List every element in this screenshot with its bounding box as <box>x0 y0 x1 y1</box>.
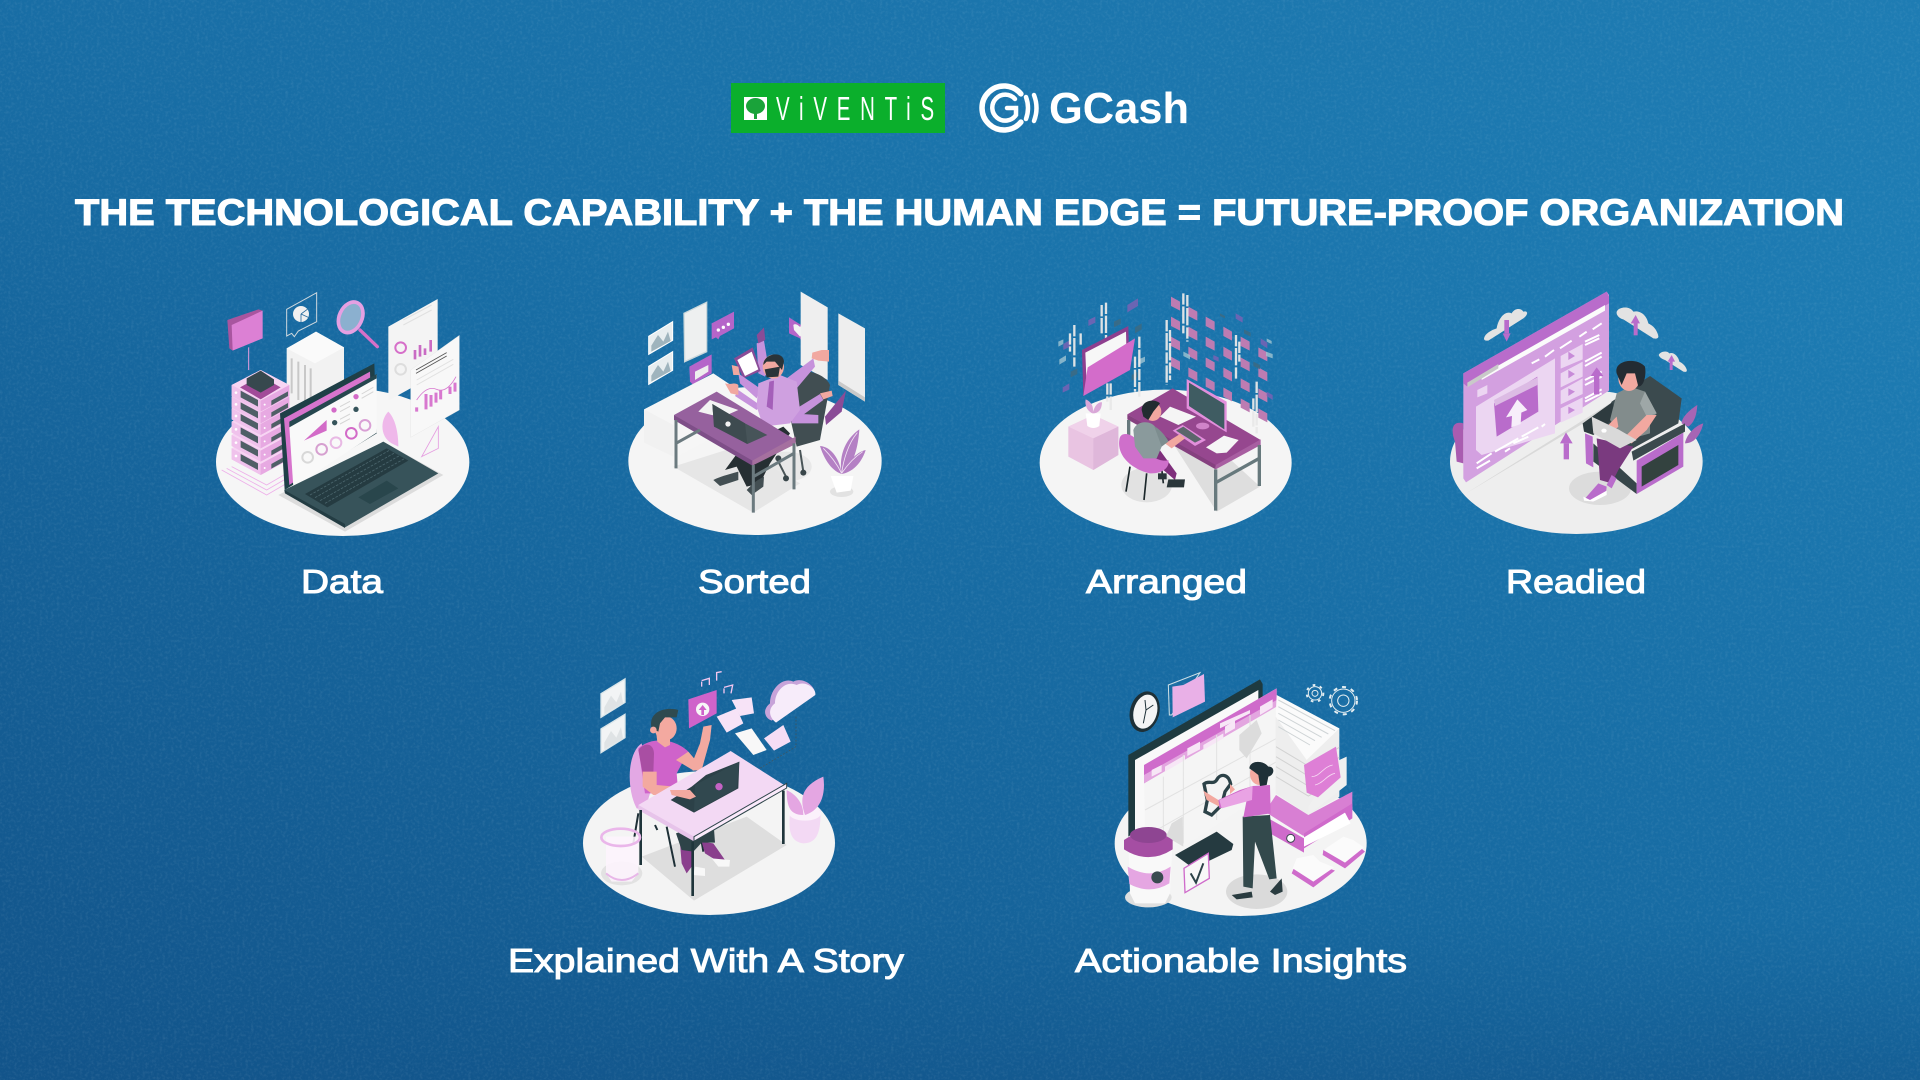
title: THE TECHNOLOGICAL CAPABILITY + THE HUMAN EDGE = FUTURE-PROOF ORGANIZATION <box>75 191 1844 233</box>
label: Readied: Readied <box>1506 563 1646 600</box>
logo: GCash: GCash <box>1049 84 1189 133</box>
label: Explained With A Story: Explained With A Story <box>508 942 905 979</box>
illustration: puzzle and calendar <box>1115 673 1367 916</box>
illustration: data dashboard <box>216 293 469 536</box>
logo: Viventis <box>731 83 945 133</box>
label: Actionable Insights: Actionable Insights <box>1075 942 1407 979</box>
panel: Explained With A Story <box>508 672 905 979</box>
panel: Arranged <box>1040 293 1292 600</box>
panel: Sorted <box>628 292 882 600</box>
illustration: uploading video in browser <box>1450 292 1703 534</box>
illustration: arranging folders and data <box>1040 293 1292 536</box>
label: Data: Data <box>301 563 384 600</box>
label: Sorted: Sorted <box>698 563 811 600</box>
illustration: multitasking man at desk <box>628 292 882 535</box>
logo: Viventis: ViVENTiS <box>776 90 934 127</box>
logo: GCash <box>982 84 1189 133</box>
label: Arranged: Arranged <box>1086 563 1247 600</box>
panel: Actionable Insights <box>1075 673 1407 979</box>
illustration: man telling a story at laptop <box>583 672 835 915</box>
panel: Data <box>216 293 469 600</box>
panel: Readied <box>1450 292 1703 600</box>
